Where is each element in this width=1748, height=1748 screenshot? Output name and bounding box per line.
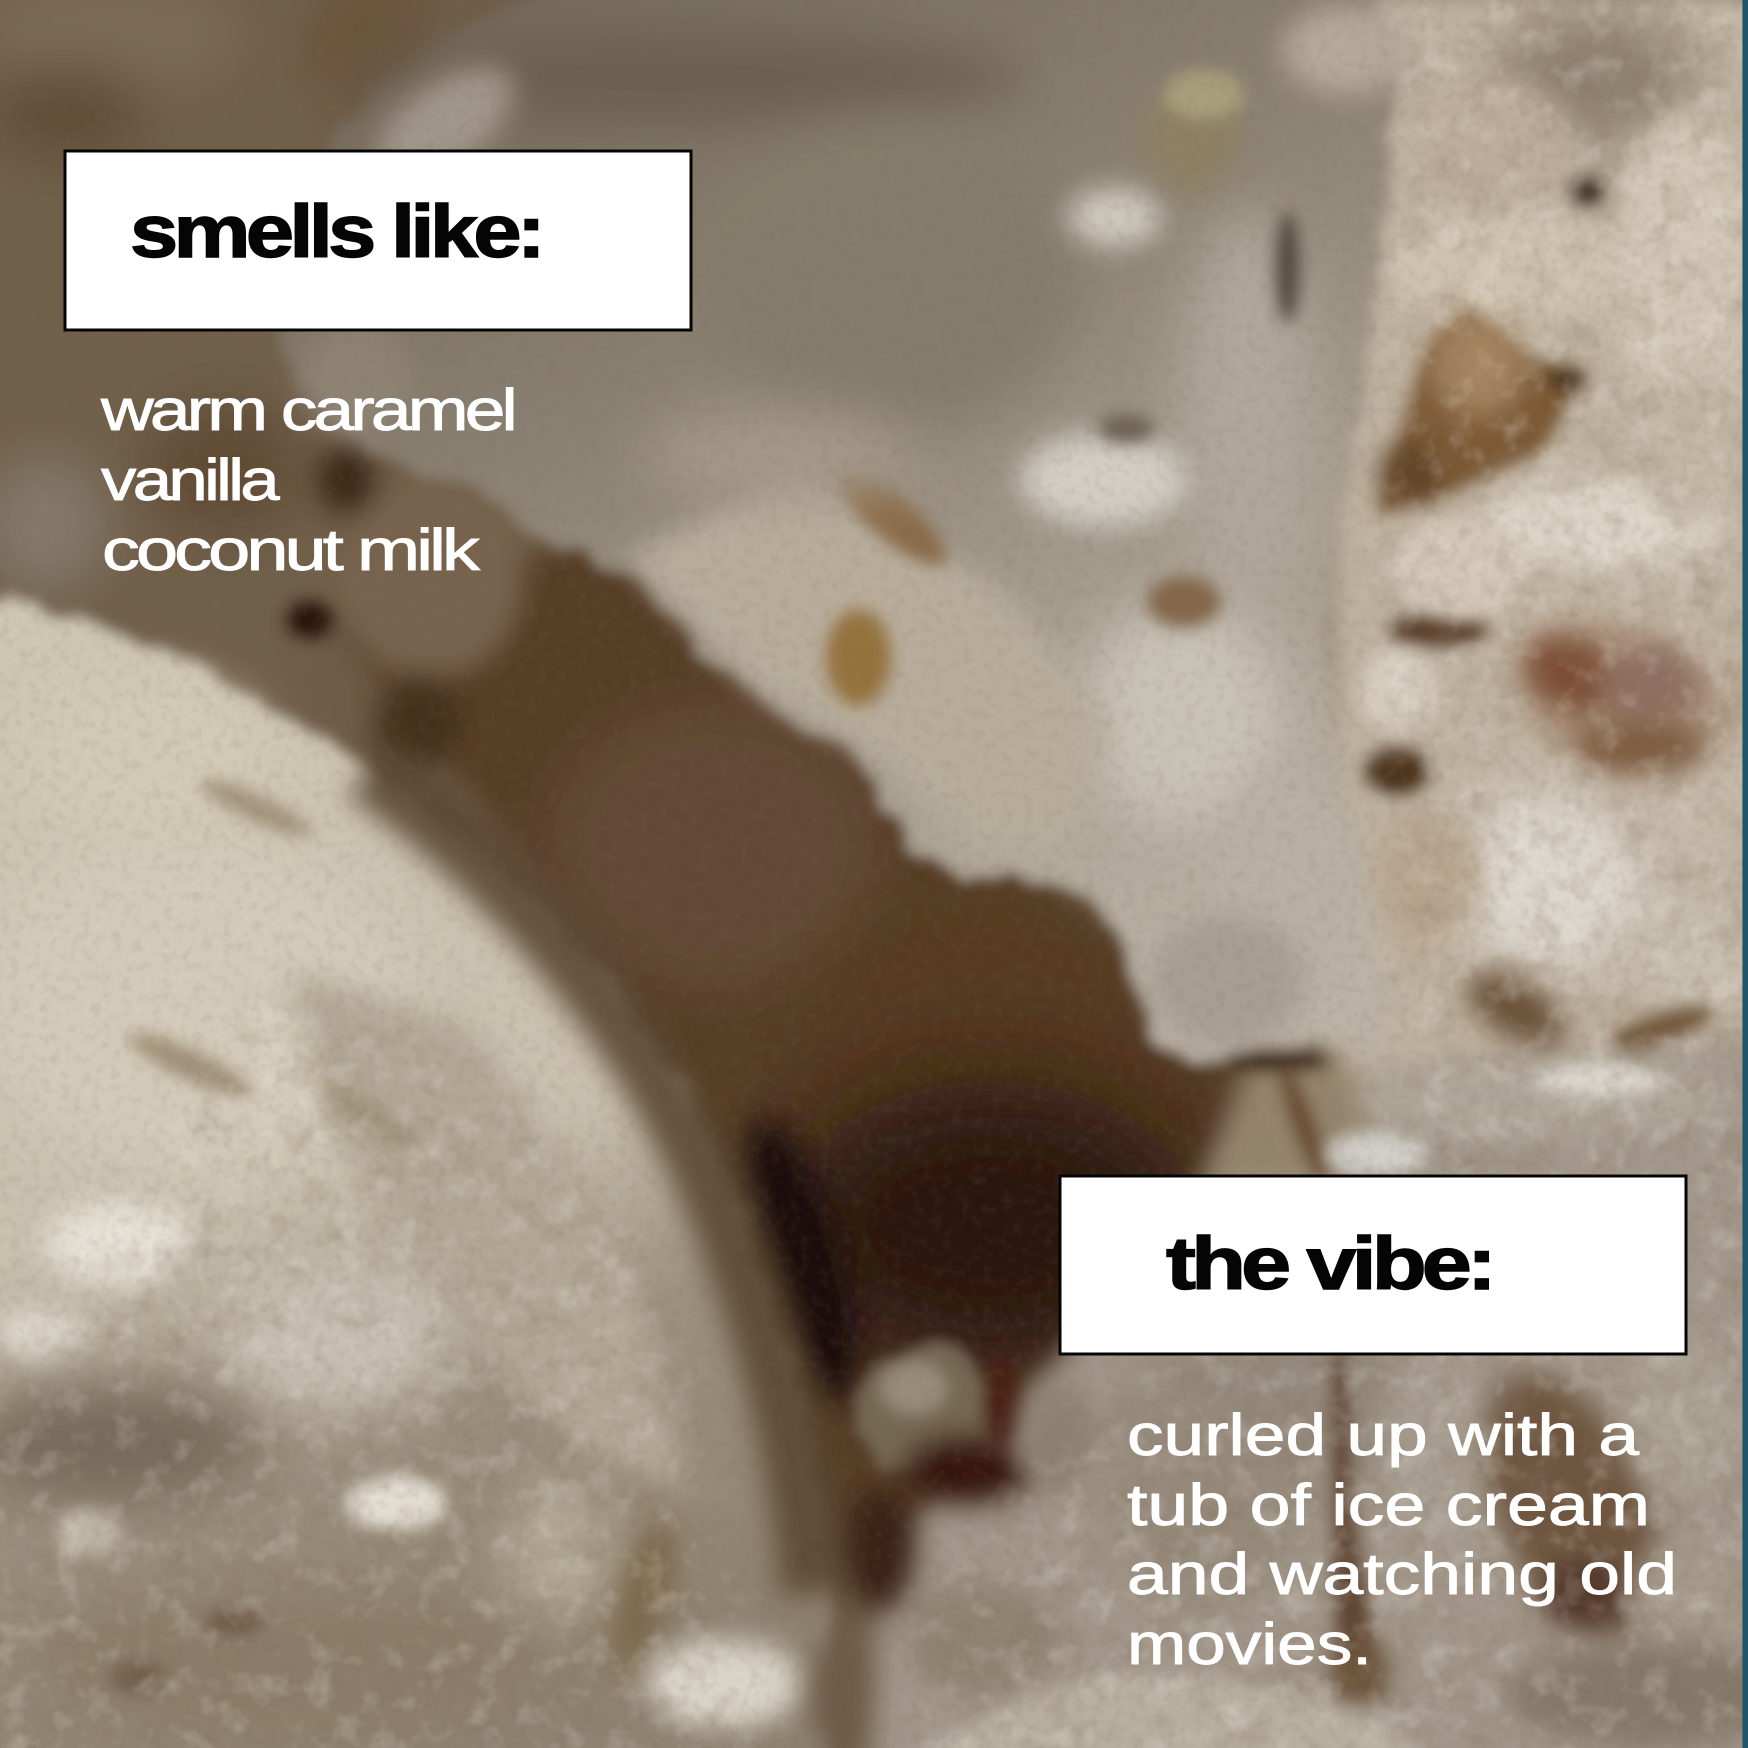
bottom right surface [870,956,1748,1748]
text block: vibe description [1127,1403,1677,1677]
text block: scent list [100,378,514,583]
text block: vibe description: tub of ice cream [1127,1473,1650,1538]
right crumbly mass [1327,0,1748,1126]
text block: scent list: coconut milk [102,518,481,583]
upper scoop [277,0,1416,1066]
heading: the vibe: the vibe: [1166,1222,1492,1305]
bulge under upper scoop [334,479,524,680]
small crumb chunk at cavity base [845,1343,1099,1612]
text block: vibe description: curled up with a [1127,1403,1640,1468]
heading: smells like: smells like: [130,190,541,273]
top-left brown scoop [0,0,424,647]
text block: vibe description: movies. [1127,1612,1372,1677]
text block: scent list: warm caramel [100,378,514,443]
text block: scent list: vanilla [101,448,281,513]
text block: vibe description: and watching old [1127,1542,1677,1607]
lower left scoop [0,591,863,1748]
right edge strip [1742,0,1748,1748]
dark cavity behind scoops [334,524,1260,1605]
panel: smells like heading box [65,151,691,330]
brown cavity right [1361,307,1745,798]
panel: the vibe heading box [1060,1176,1686,1354]
